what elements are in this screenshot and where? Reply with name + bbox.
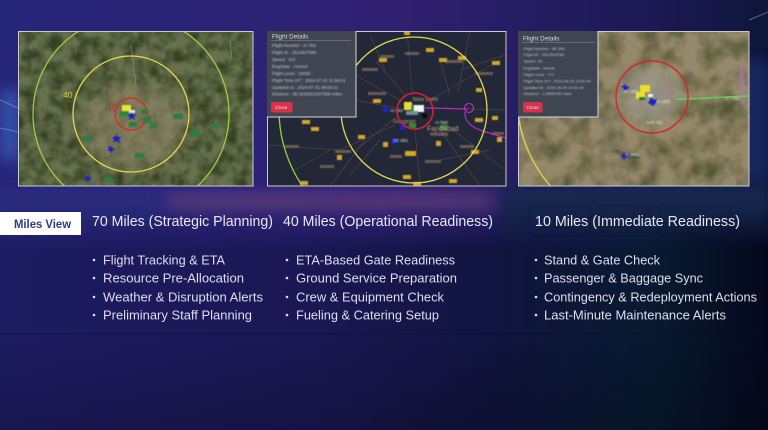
panel border	[518, 32, 749, 186]
close button: Close	[526, 105, 539, 111]
range ring: yellow arc	[519, 118, 551, 186]
dialog title: Flight Details	[272, 34, 308, 40]
flight detail lines: Flight Number : 6E 590	[524, 46, 565, 51]
bullet list: 40 miles: ETA-Based Gate Readiness	[296, 252, 455, 268]
range ring: 10 miles	[616, 61, 688, 133]
map text labels: AI 1582	[656, 99, 671, 104]
map markers	[620, 84, 657, 160]
map text labels: AAR 392	[646, 120, 663, 125]
column heading: 10 miles: 10 Miles (Immediate Readiness)	[535, 214, 740, 230]
row label: Miles View: Miles View	[14, 219, 71, 231]
flight detail lines: EngState : Arrival	[524, 66, 555, 70]
flight detail lines: Flight Level : 16063	[272, 71, 311, 76]
flight detail lines: Flight Number : AI 769	[272, 43, 316, 48]
flight detail lines	[272, 43, 346, 96]
flight detail lines: Updated At : 2024-06-25 10:52:49	[524, 85, 585, 90]
row label: Miles View	[0, 212, 81, 235]
close button: Close	[275, 105, 288, 111]
flight detail lines: Flight Time IST : 2024-06-25 10:52:49	[524, 78, 592, 84]
map text labels: Faridabad	[427, 126, 459, 133]
map text labels: AI 582	[390, 108, 404, 113]
range ring: 10 miles	[397, 93, 433, 129]
range ring: 40 miles	[341, 37, 487, 183]
flight detail lines: Flight Time IST : 2024-07-31 11:58:24	[272, 78, 346, 83]
dialog title: Flight Details	[523, 36, 559, 42]
map text labels: AI 560	[435, 120, 449, 125]
map text labels: AI 2841	[625, 152, 640, 157]
flight detail lines: EngState : Arrived	[272, 64, 308, 69]
map text labels: New Delhi	[413, 97, 438, 103]
map text labels	[624, 89, 740, 157]
range ring: 70 miles	[32, 32, 230, 186]
flight detail lines: Distance : 80.3235523337589 miles	[272, 92, 343, 96]
panel: 70 miles satellite map	[19, 32, 252, 186]
panel: 40 miles road map	[268, 32, 506, 186]
flight details dialog: 10 miles	[518, 31, 598, 117]
label: 40: 40	[63, 90, 73, 100]
range ring: 40 miles	[73, 56, 189, 172]
map text labels: AI 1000	[725, 96, 740, 101]
bullet list: 40 miles: Ground Service Preparation	[296, 270, 457, 286]
purple flight trail	[425, 104, 506, 138]
bullet list: 70 miles	[93, 252, 263, 322]
map text labels: फरीदाबाद	[430, 131, 448, 138]
road network	[267, 31, 505, 186]
flight details dialog: 40 miles	[267, 31, 356, 117]
road shields	[300, 31, 502, 186]
bullet list: 10 miles: Passenger & Baggage Sync	[544, 270, 703, 286]
map text labels	[390, 97, 459, 143]
flight detail lines: Speed : 321	[272, 57, 296, 62]
flight detail lines: Speed : 81	[524, 58, 544, 64]
bullet list: 70 miles: Resource Pre-Allocation	[103, 270, 244, 286]
map text labels: DE 892	[393, 138, 409, 143]
bullet list: 40 miles	[286, 252, 457, 322]
bullet list: 10 miles: Stand & Gate Check	[544, 252, 660, 268]
bullet list: 70 miles: Flight Tracking & ETA	[103, 252, 225, 268]
bullet list: 10 miles: Last-Minute Maintenance Alerts	[544, 308, 726, 322]
green flight trail	[676, 96, 749, 100]
flight detail lines: Flight ID : 2513847590	[272, 50, 317, 55]
flight detail lines: Flight ID : 2512543768	[524, 52, 565, 57]
column heading: 40 miles: 40 Miles (Operational Readiness)	[283, 214, 493, 230]
map text labels: Gurugram	[393, 119, 416, 125]
bullet list: 70 miles: Preliminary Staff Planning	[103, 308, 252, 322]
bullet list: 40 miles: Crew & Equipment Check	[296, 290, 444, 304]
range ring: 70 miles	[278, 118, 303, 186]
flight detail lines: Flight Level : 771	[524, 72, 555, 77]
range ring: 10 miles	[115, 98, 147, 130]
bullet list: 40 miles: Fueling & Catering Setup	[296, 308, 439, 322]
map markers	[383, 102, 447, 144]
bullet list: 10 miles	[535, 252, 757, 322]
column heading: 70 miles: 70 Miles (Strategic Planning)	[92, 214, 273, 230]
place labels	[285, 52, 504, 168]
label: 10: 10	[107, 103, 116, 112]
bullet list: 70 miles: Weather & Disruption Alerts	[103, 290, 263, 304]
bullet list: 10 miles: Contingency & Redeployment Actions	[544, 290, 757, 304]
flight detail lines: Updated At : 2024-07-31 09:00:41	[272, 85, 339, 90]
panel: 10 miles satellite map	[519, 32, 748, 186]
map markers	[83, 105, 220, 182]
panel border	[18, 32, 253, 186]
flight detail lines: Distance : 1.5505780 miles	[524, 91, 572, 96]
panel border	[268, 32, 506, 186]
map text labels: IX 1252	[624, 89, 639, 94]
flight detail lines	[524, 46, 592, 96]
